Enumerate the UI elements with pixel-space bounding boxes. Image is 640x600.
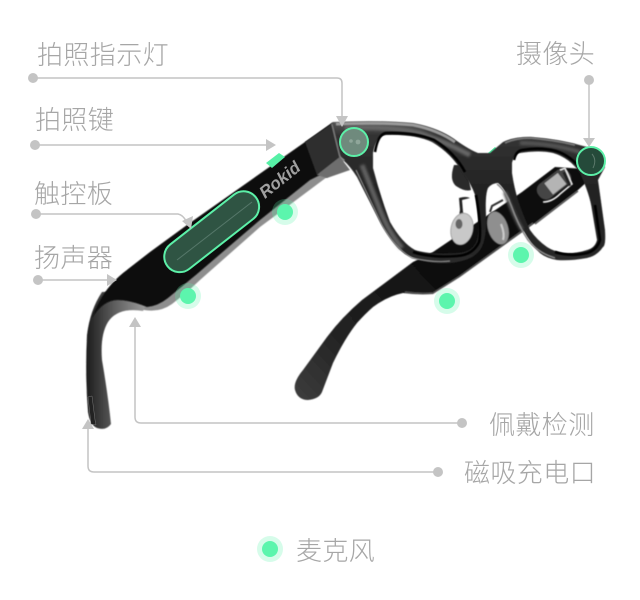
Rokid logo: Rokid (256, 157, 305, 202)
leader: photo key (30, 139, 276, 151)
near temple arm (92, 122, 333, 318)
label: 拍照键: 拍照键 (35, 105, 114, 135)
front frame (310, 121, 605, 263)
photo key marker (266, 153, 285, 168)
near temple ear hook (86, 292, 147, 429)
label: 扬声器: 扬声器 (34, 243, 113, 273)
camera highlight (577, 147, 605, 175)
leader: magnetic charging (82, 419, 443, 477)
label: 磁吸充电口: 磁吸充电口 (464, 458, 596, 488)
legend: microphone (257, 536, 375, 566)
touch panel highlight (158, 185, 265, 278)
frame rim lines and highlights (336, 123, 600, 262)
label: 佩戴检测: 佩戴检测 (489, 410, 595, 440)
magnetic charging port (88, 396, 96, 425)
hinge block (305, 123, 350, 178)
far temple arm (295, 167, 600, 400)
leader: speaker (33, 274, 117, 286)
frame soft sheen (345, 128, 580, 248)
leader: touch panel (31, 209, 193, 229)
nose pads (448, 165, 513, 247)
label: 拍照指示灯: 拍照指示灯 (37, 40, 169, 70)
leader: wear detection (129, 317, 467, 428)
photo indicator light highlight (340, 128, 368, 156)
microphone dots (175, 199, 534, 314)
legend: microphone: 麦克风 (296, 536, 375, 566)
label: 摄像头: 摄像头 (516, 39, 595, 69)
inner temple module (533, 165, 575, 203)
near temple underside (140, 150, 345, 311)
leader: photo indicator light (28, 73, 348, 127)
leader: camera (583, 75, 595, 147)
microphone mark behind frame (488, 147, 500, 158)
label: 触控板: 触控板 (34, 179, 113, 209)
